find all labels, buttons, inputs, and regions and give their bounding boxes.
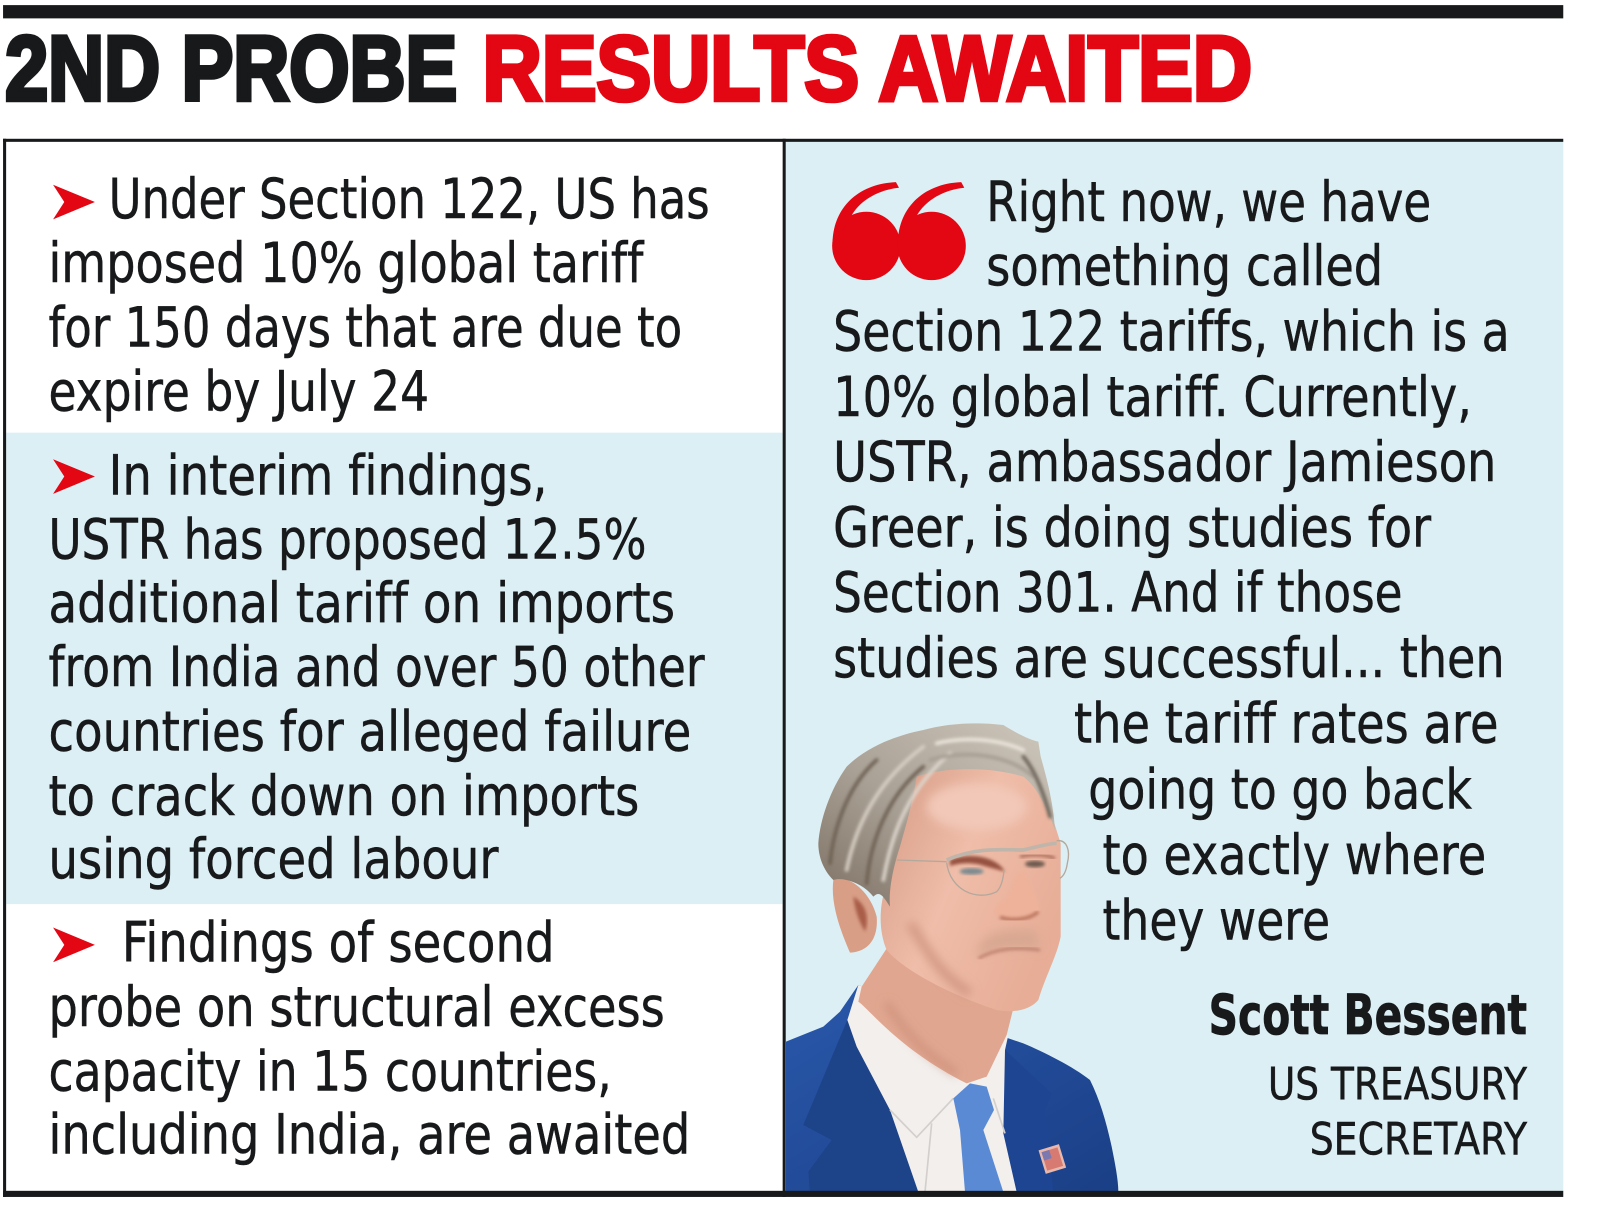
- cheek shading: [910, 923, 970, 993]
- attribution: SECRETARY: [1310, 1113, 1528, 1166]
- point 2: interim findings: [48, 443, 705, 891]
- quote text: [833, 170, 1510, 952]
- quote text: USTR, ambassador Jamieson: [833, 430, 1496, 494]
- point 3: second probe: probe on structural excess: [48, 975, 665, 1039]
- top rule: [3, 5, 1563, 18]
- point 2: interim findings: additional tariff on imports: [48, 571, 675, 635]
- point 2: interim findings: using forced labour: [48, 827, 499, 891]
- panel: quote: [786, 142, 1563, 1192]
- quote text: going to go back: [1088, 758, 1472, 822]
- nose underside: [1000, 912, 1038, 920]
- attribution: US TREASURY: [1268, 1057, 1528, 1110]
- panel: key points: [3, 140, 786, 1197]
- left lapel: [803, 1020, 918, 1192]
- point 2: interim findings: In interim findings,: [109, 443, 547, 507]
- quote text: the tariff rates are: [1074, 691, 1498, 755]
- neck shading: [887, 1003, 957, 1073]
- right lapel: [1003, 1050, 1053, 1192]
- point 3: second probe: including India, are awaited: [48, 1103, 690, 1167]
- icon: red arrow: [53, 928, 95, 962]
- quote text: Right now, we have: [986, 170, 1431, 234]
- upper lip area: [977, 929, 1040, 957]
- quote text: Section 301. And if those: [833, 561, 1403, 625]
- hair: [818, 723, 1055, 907]
- icon: red arrow: [53, 459, 95, 494]
- title: RESULTS AWAITED: [483, 18, 1252, 120]
- suit jacket: [786, 985, 1118, 1192]
- shirt and collar: [847, 985, 1017, 1192]
- title: [5, 18, 1252, 120]
- portrait: Scott Bessent: [786, 723, 1118, 1192]
- attribution: [1209, 983, 1528, 1166]
- face: [881, 768, 1061, 1011]
- inner ear: [853, 897, 867, 932]
- point 2: interim findings: USTR has proposed 12.5%: [48, 508, 646, 572]
- band: second point background: [6, 433, 783, 904]
- point 1: Section 122 tariff: Under Section 122, US has: [109, 167, 710, 231]
- point 3: second probe: [48, 911, 690, 1167]
- point 2: interim findings: from India and over 50 other: [48, 635, 705, 699]
- far brow: [1020, 855, 1055, 858]
- ear: [833, 879, 877, 953]
- hair strands: [830, 739, 1050, 883]
- nose: [995, 870, 1039, 920]
- icon: red arrow: [53, 185, 95, 219]
- point 1: Section 122 tariff: for 150 days that are due to: [48, 295, 682, 359]
- point 1: Section 122 tariff: expire by July 24: [48, 360, 429, 424]
- point 2: interim findings: countries for alleged failure: [48, 700, 691, 764]
- collar shading: [890, 1098, 1005, 1192]
- far eye: [1025, 861, 1045, 867]
- point 1: Section 122 tariff: [48, 167, 710, 424]
- tie: [953, 1083, 1003, 1192]
- quote text: something called: [986, 234, 1383, 298]
- glasses: [897, 841, 1068, 895]
- forehead highlight: [927, 783, 1027, 830]
- lapel pin: [1039, 1144, 1066, 1174]
- point 3: second probe: Findings of second: [122, 911, 555, 975]
- icon: quotation mark: [832, 182, 966, 280]
- near eye: [960, 868, 984, 875]
- point 1: Section 122 tariff: imposed 10% global tariff: [48, 231, 645, 295]
- quote text: Greer, is doing studies for: [833, 495, 1431, 559]
- title: 2ND PROBE: [5, 18, 457, 120]
- near brow: [950, 856, 1005, 872]
- point 3: second probe: capacity in 15 countries,: [48, 1039, 612, 1103]
- mouth: [978, 948, 1040, 958]
- quote text: 10% global tariff. Currently,: [833, 365, 1472, 429]
- neck: [858, 943, 1013, 1083]
- point 2: interim findings: to crack down on imports: [48, 764, 639, 828]
- eyebrow hairs: [947, 843, 1057, 860]
- quote text: they were: [1103, 888, 1330, 952]
- quote text: to exactly where: [1103, 823, 1486, 887]
